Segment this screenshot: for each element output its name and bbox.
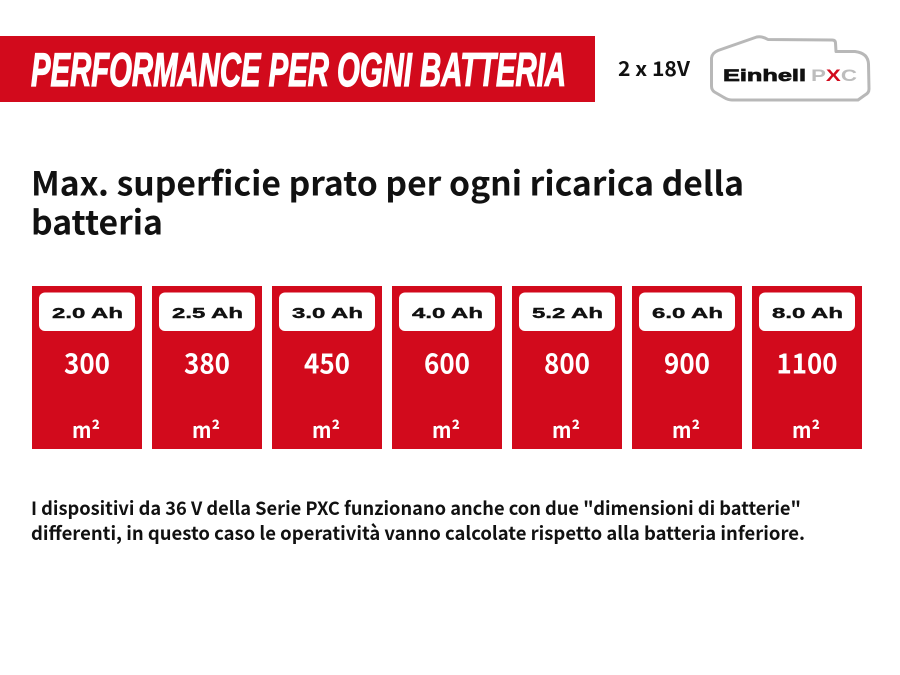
footnote text: differenti, in questo caso le operatività vanno calcolate rispetto alla batteria inferiore. <box>31 520 805 546</box>
card: 2.0 Ah: 300 <box>64 342 110 382</box>
card: 4.0 Ah: m² <box>432 415 460 445</box>
card: 3.0 Ah <box>272 286 382 449</box>
footnote text: I dispositivi da 36 V della Serie PXC funzionano anche con due "dimensioni di batterie" <box>31 495 801 521</box>
card: 6.0 Ah: 900 <box>664 342 710 382</box>
heading <box>31 158 744 244</box>
heading: batteria <box>31 196 163 244</box>
card: 2.0 Ah: 2.0 Ah <box>52 305 123 322</box>
card: 5.2 Ah: 800 <box>544 342 590 382</box>
card: 6.0 Ah: m² <box>672 415 700 445</box>
card: 6.0 Ah <box>632 286 742 449</box>
voltage label: 2 x 18V <box>618 53 691 82</box>
heading: Max. superficie prato per ogni ricarica della <box>31 158 744 206</box>
icon: Einhell PXC battery: Einhell <box>723 66 806 85</box>
card: 8.0 Ah <box>752 286 862 449</box>
card: 8.0 Ah: 8.0 Ah <box>772 305 843 322</box>
footnote text <box>31 495 805 546</box>
card: 6.0 Ah: 6.0 Ah <box>652 305 723 322</box>
card: 2.0 Ah <box>32 286 142 449</box>
card: 8.0 Ah: 1100 <box>776 342 838 382</box>
icon: Einhell PXC battery: PXC <box>811 66 857 85</box>
card: 3.0 Ah: 450 <box>304 342 350 382</box>
card: 4.0 Ah <box>392 286 502 449</box>
card: 5.2 Ah: 5.2 Ah <box>532 305 603 322</box>
card: 8.0 Ah: m² <box>792 415 820 445</box>
card: 2.5 Ah: m² <box>192 415 220 445</box>
header banner <box>0 36 595 102</box>
card: 5.2 Ah <box>512 286 622 449</box>
card: 2.5 Ah: 2.5 Ah <box>172 305 243 322</box>
card: 4.0 Ah: 600 <box>424 342 470 382</box>
card: 3.0 Ah: m² <box>312 415 340 445</box>
header banner: PERFORMANCE PER OGNI BATTERIA <box>31 43 566 96</box>
icon: Einhell PXC battery <box>712 37 869 100</box>
card: 5.2 Ah: m² <box>552 415 580 445</box>
card: 2.0 Ah: m² <box>72 415 100 445</box>
card: 2.5 Ah <box>152 286 262 449</box>
card: 3.0 Ah: 3.0 Ah <box>292 305 363 322</box>
card: 4.0 Ah: 4.0 Ah <box>412 305 483 322</box>
card: 2.5 Ah: 380 <box>184 342 230 382</box>
